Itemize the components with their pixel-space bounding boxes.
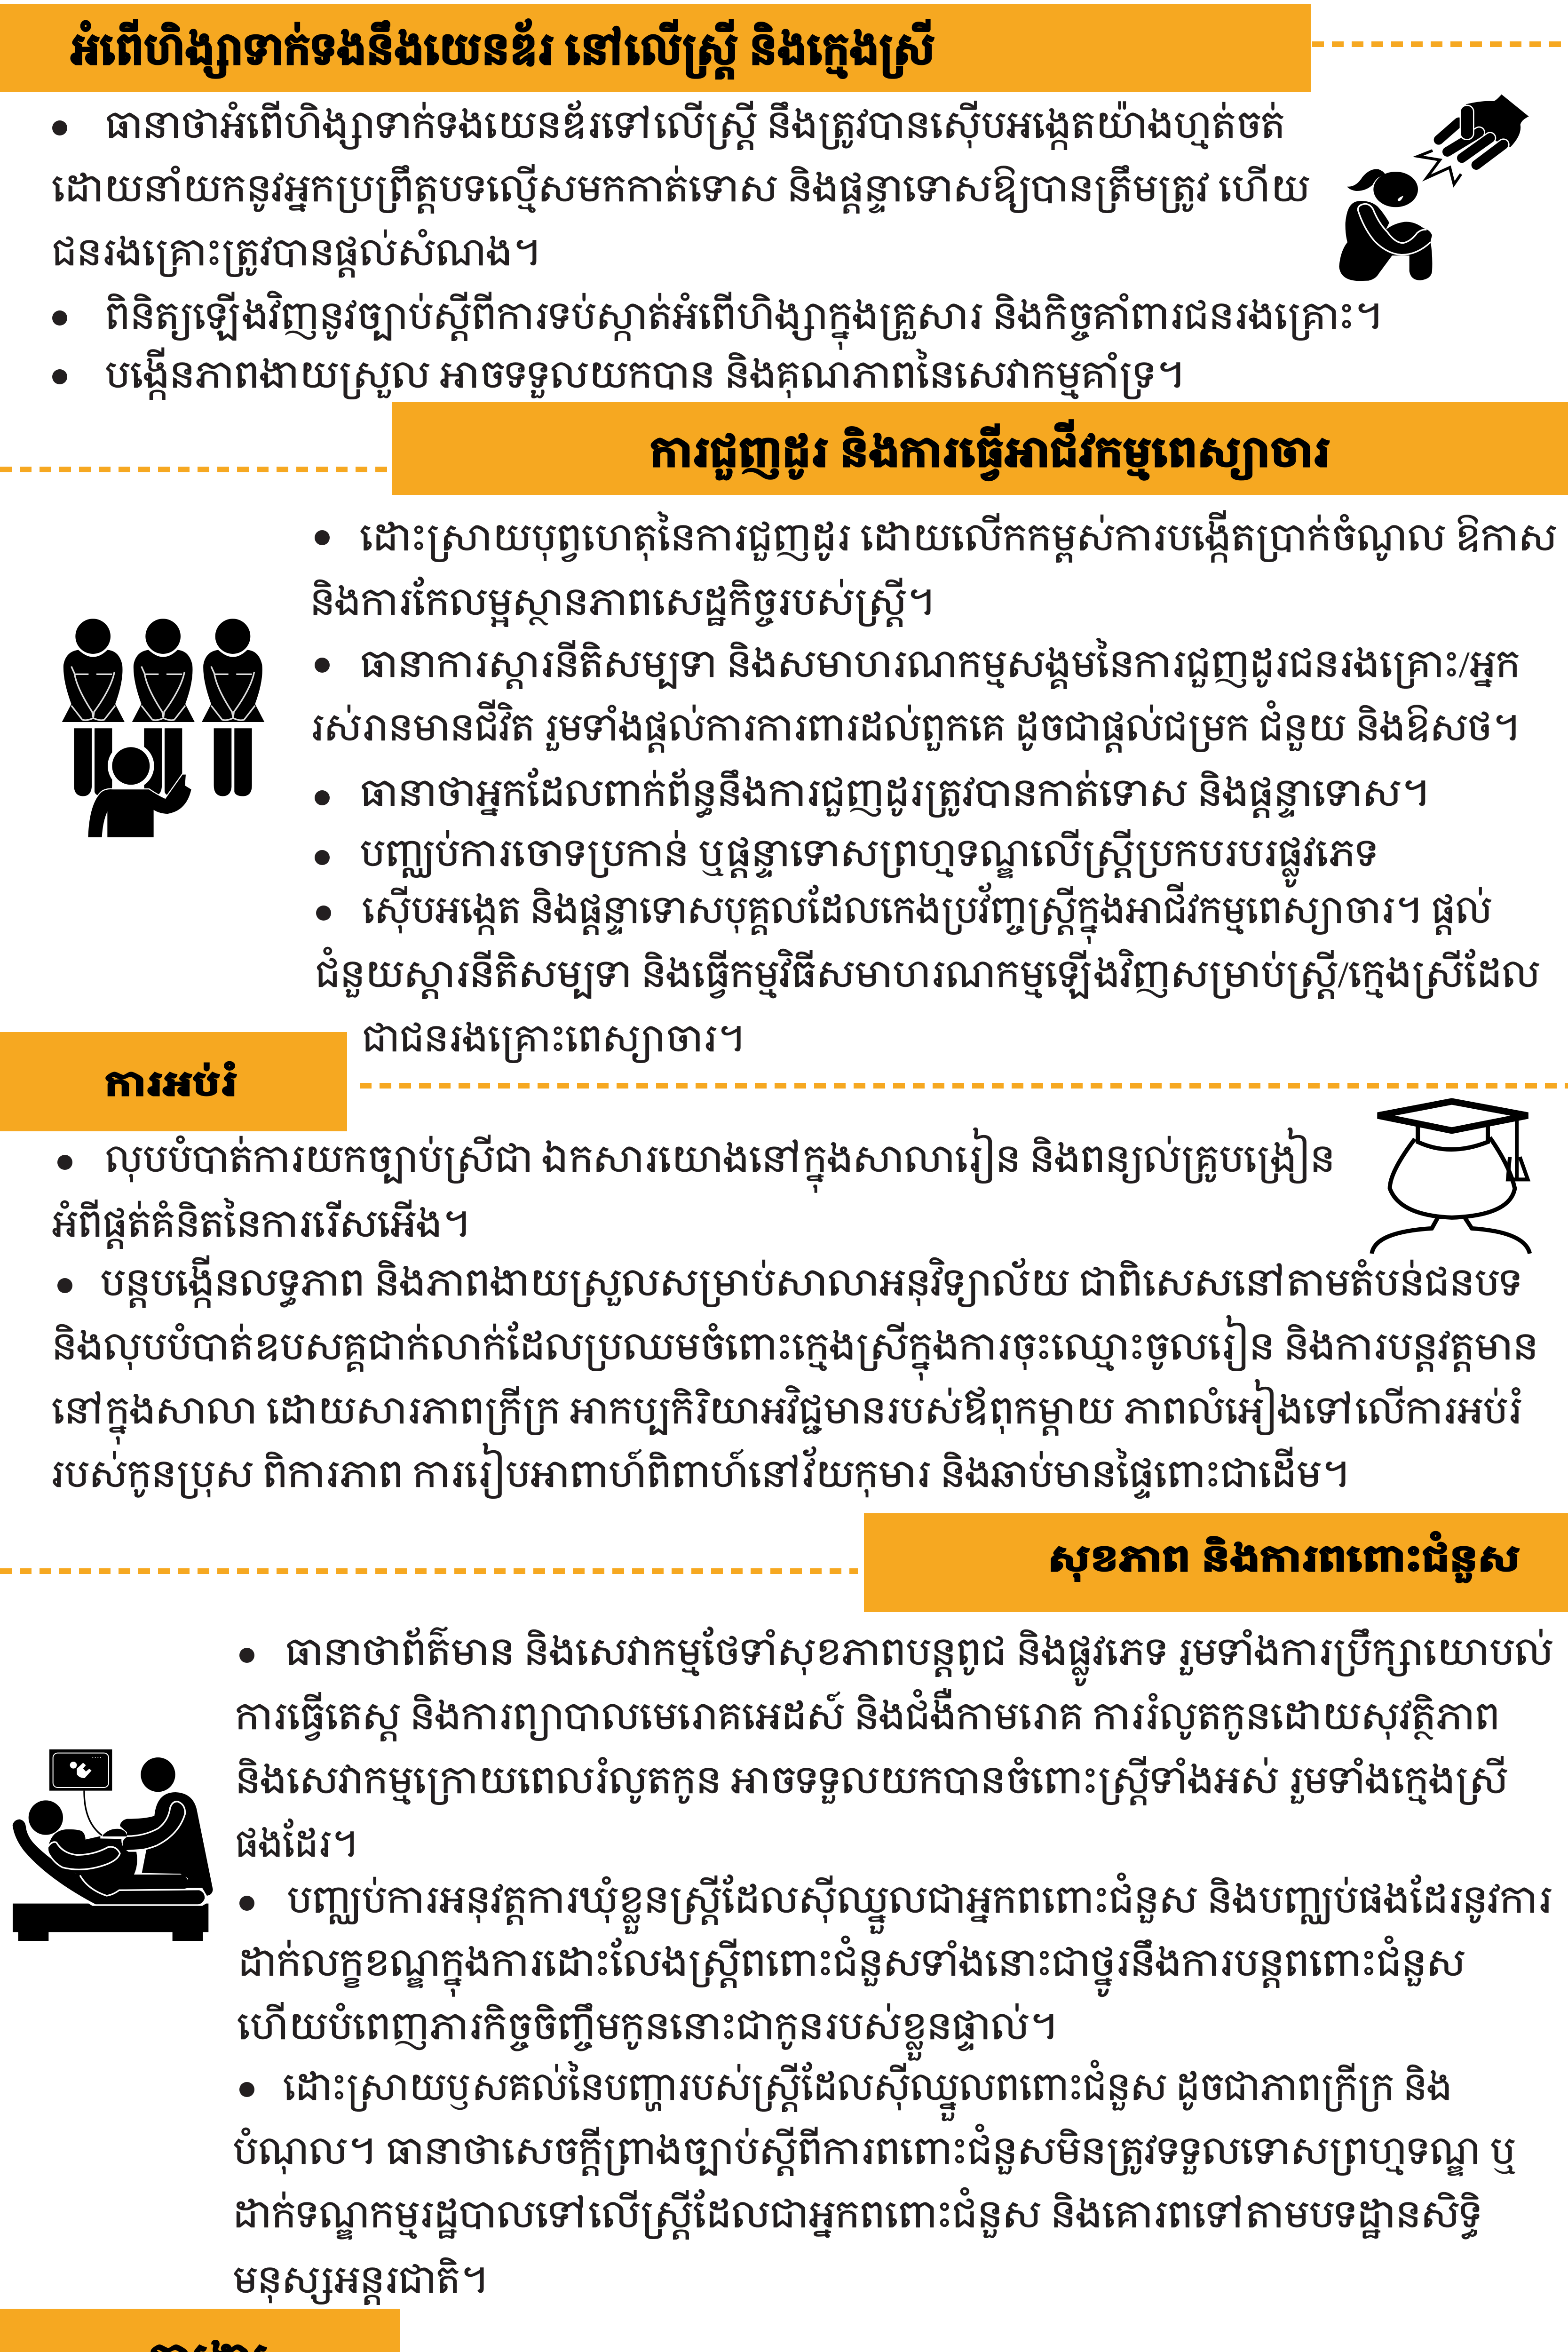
heading: gender-based violence	[0, 4, 1311, 92]
text block: trafficking points: ជំនួយស្តារនីតិសម្បទា និងធ្វើកម្មវិធីសមាហរណកម្មឡើងវិញសម្រាប់ស្ត្រី/ក្មេងស្រីដែល	[315, 947, 1540, 999]
text block: education points: អំពីផ្តត់គំនិតនៃការរើសអើង។	[52, 1198, 470, 1249]
text block: trafficking points: និងការកែលម្អស្ថានភាពសេដ្ឋកិច្ចរបស់ស្ត្រី។	[310, 577, 935, 627]
text block: education points: របស់កូនប្រុស ពិការភាព ការរៀបអាពាហ៍ពិពាហ៍នៅវ័យកុមារ និងឆាប់មានផ្ទៃពោះជាដើម។	[50, 1443, 1350, 1499]
text block: trafficking points: ស៊ើបអង្កេត និងផ្តន្ទាទោសបុគ្គលដែលកេងប្រវ័ញ្ចស្ត្រីក្នុងអាជីវកម្មពេស្យាចារ។ ផ្តល់	[362, 882, 1492, 944]
text block: trafficking points: បញ្ឈប់ការចោទប្រកាន់ ឬផ្តន្ទាទោសព្រហ្មទណ្ឌលើស្ត្រីប្រកបរបរផ្លូវភេទ	[360, 829, 1378, 887]
text block: education points: នៅក្នុងសាលា ដោយសារភាពក្រីក្រ អាកប្បកិរិយាអវិជ្ជមានរបស់ឪពុកម្តាយ ភាពលំអៀងទៅលើការអប់រំ	[52, 1379, 1522, 1444]
text block: trafficking points: ដោះស្រាយបុព្វហេតុនៃការជួញដូរ ដោយលើកកម្ពស់ការបង្កើតប្រាក់ចំណូល ឱកាស	[360, 511, 1557, 563]
text block: gender-based violence points: បង្កើនភាពងាយស្រួល អាចទទួលយកបាន និងគុណភាពនៃសេវាកម្មគាំទ្រ។	[105, 348, 1185, 400]
text block: education points	[50, 1128, 1538, 1499]
text block: health points: ហើយបំពេញភារកិច្ចចិញ្ចឹមកូននោះជាកូនរបស់ខ្លួនផ្ទាល់។	[237, 2002, 1058, 2060]
text block: trafficking points	[310, 511, 1557, 1063]
text block: gender-based violence points: ដោយនាំយកនូវអ្នកប្រព្រឹត្តបទល្មើសមកកាត់ទោស និងផ្តន្ទាទោសឱ្យបានត្រឹមត្រូវ ហើយ	[52, 165, 1310, 214]
heading: health and surrogacy: សុខភាព និងការពពោះជំនួស	[1048, 1532, 1520, 1582]
panel: health and surrogacy	[0, 1513, 1568, 2305]
panel: trafficking and prostitution	[0, 402, 1568, 1063]
panel: education	[0, 1032, 1568, 1499]
text block: gender-based violence points: ធានាថាអំពើហិង្សាទាក់ទងយេនឌ័រទៅលើស្ត្រី នឹងត្រូវបានស៊ើបអង្កេតយ៉ាងហ្មត់ចត់	[105, 100, 1285, 150]
panel: gender-based violence against women and girls	[0, 4, 1568, 400]
text block: health points: ដោះស្រាយឫសគល់នៃបញ្ហារបស់ស្ត្រីដែលស៊ីឈ្នួលពពោះជំនួស ដូចជាភាពក្រីក្រ និង	[283, 2060, 1452, 2121]
text block: health points: បំណុល។ ធានាថាសេចក្តីព្រាងច្បាប់ស្តីពីការពពោះជំនួសមិនត្រូវទទួលទោសព្រហ្មទណ្ឌ ឬ	[233, 2124, 1518, 2177]
text block: trafficking points: ធានាការស្តារនីតិសម្បទា និងសមាហរណកម្មសង្គមនៃការជួញដូរជនរងគ្រោះ/អ្នក	[360, 638, 1520, 689]
text block: health points: ការធ្វើតេស្ត និងការព្យាបាលមេរោគអេដស៍ និងជំងឺកាមរោគ ការរំលូតកូនដោយសុវត្ថិភាព	[235, 1689, 1500, 1741]
heading: trafficking and prostitution	[392, 402, 1568, 495]
text block: education points: បន្តបង្កើនលទ្ធភាព និងភាពងាយស្រួលសម្រាប់សាលាអនុវិទ្យាល័យ ជាពិសេសនៅតាមតំបន់ជនបទ	[100, 1256, 1522, 1308]
text block: health points: ដាក់ទណ្ឌកម្មរដ្ឋបាលទៅលើស្ត្រីដែលជាអ្នកពពោះជំនួស និងគោរពទៅតាមបទដ្ឋានសិទ្ធិ	[233, 2188, 1482, 2240]
icon: graduate with cap	[1372, 1101, 1530, 1254]
text block: gender-based violence points: ពិនិត្យឡើងវិញនូវច្បាប់ស្តីពីការទប់ស្កាត់អំពើហិង្សាក្នុងគ្រួសារ និងកិច្ចគាំពារជនរងគ្រោះ។	[105, 291, 1383, 350]
heading: work	[0, 2309, 400, 2352]
text block: health points	[233, 1627, 1553, 2305]
heading: education: ការអប់រំ	[105, 1062, 237, 1103]
text block: gender-based violence points: ជនរងគ្រោះត្រូវបានផ្តល់សំណង។	[52, 229, 541, 278]
text block: education points: និងលុបបំបាត់ឧបសគ្គជាក់លាក់ដែលប្រឈមចំពោះក្មេងស្រីក្នុងការចុះឈ្មោះចូលរៀន និងការបន្តវត្តមាន	[52, 1315, 1538, 1380]
heading: gender-based violence: អំពើហិង្សាទាក់ទងនឹងយេនឌ័រ នៅលើស្ត្រី និងក្មេងស្រី	[70, 19, 935, 79]
text block: health points: ផងដែរ។	[235, 1819, 358, 1865]
heading: health and surrogacy	[864, 1513, 1568, 1612]
text block: trafficking points: ធានាថាអ្នកដែលពាក់ព័ន្ធនឹងការជួញដូរត្រូវបានកាត់ទោស និងផ្តន្ទាទោស។	[360, 768, 1430, 818]
heading: education	[0, 1032, 347, 1131]
icon: fist striking woman	[1339, 95, 1529, 281]
text block: health points: ធានាថាព័ត៌មាន និងសេវាកម្មថែទាំសុខភាពបន្តពូជ និងផ្លូវភេទ រួមទាំងការប្រឹក្សាយោបល់	[285, 1627, 1553, 1686]
icon: three women and a figure	[62, 619, 264, 837]
text block: gender-based violence points	[52, 100, 1383, 400]
text block: education points: លុបបំបាត់ការយកច្បាប់ស្រីជា ឯកសារយោងនៅក្នុងសាលារៀន និងពន្យល់គ្រូបង្រៀន	[105, 1128, 1335, 1192]
text block: health points: បញ្ឈប់ការអនុវត្តការឃុំខ្លួនស្ត្រីដែលស៊ីឈ្នួលជាអ្នកពពោះជំនួស និងបញ្ឈប់ផងដែរនូវការ	[287, 1873, 1552, 1934]
text block: trafficking points: ជាជនរងគ្រោះពេស្យាចារ។	[362, 1018, 745, 1063]
heading: trafficking and prostitution: ការជួញដូរ និងការធ្វើអាជីវកម្មពេស្យាចារ	[650, 420, 1330, 481]
icon: ultrasound examination	[13, 1749, 213, 1941]
text block: health points: និងសេវាកម្មក្រោយពេលរំលូតកូន អាចទទួលយកបានចំពោះស្ត្រីទាំងអស់ រួមទាំងក្មេងស្រី	[235, 1756, 1508, 1805]
text block: health points: មនុស្សអន្តរជាតិ។	[233, 2258, 488, 2305]
panel: work	[0, 2309, 1568, 2352]
text block: trafficking points: រស់រានមានជីវិត រួមទាំងផ្តល់ការការពារដល់ពួកគេ ដូចជាផ្តល់ជម្រក ជំនួយ និងឱសថ។	[310, 700, 1520, 753]
text block: health points: ដាក់លក្ខខណ្ឌក្នុងការដោះលែងស្ត្រីពពោះជំនួសទាំងនោះជាថ្នូរនឹងការបន្តពពោះជំនួស	[238, 1936, 1465, 1996]
